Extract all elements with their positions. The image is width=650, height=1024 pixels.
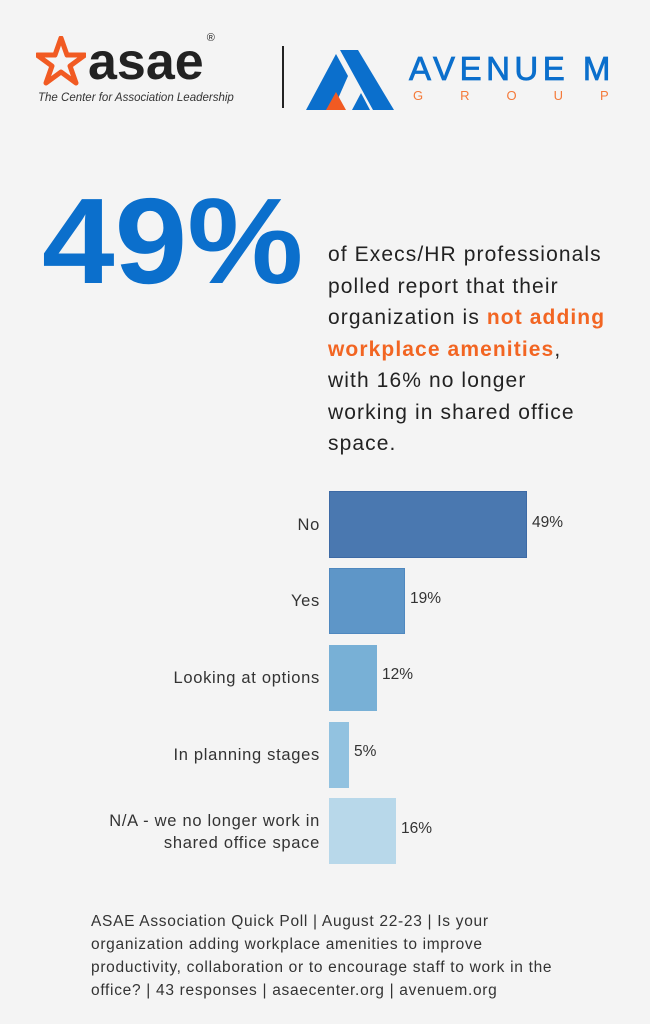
stat description: polled report that their (328, 274, 559, 298)
stat description (328, 243, 605, 455)
stat description: organization is not adding (328, 306, 605, 329)
header logos (36, 32, 646, 110)
footer source note: organization adding workplace amenities to improve (91, 936, 483, 953)
row: N/A: shared office space (164, 834, 320, 852)
footer source note: productivity, collaboration or to encourage staff to work in the (91, 959, 552, 976)
stat description: with 16% no longer (328, 369, 526, 392)
icon: asae star (36, 36, 86, 86)
stat description: working in shared office (328, 400, 575, 424)
asae tagline: The Center for Association Leadership (38, 92, 234, 104)
bar chart (109, 491, 563, 864)
stat description: space. (328, 432, 396, 455)
group text: GROUP (413, 88, 646, 103)
stat description: workplace amenities, (328, 338, 561, 360)
bar chart: 49% (532, 514, 563, 531)
row: In planning stages: In planning stages (173, 746, 320, 764)
row: N/A: N/A - we no longer work in (109, 812, 320, 830)
big stat 49%: 49% (42, 173, 303, 309)
avenue m wordmark: AVENUE M (409, 50, 615, 87)
row: N/A (109, 812, 320, 852)
bar chart: 19% (410, 590, 441, 607)
bar chart: 12% (382, 666, 413, 683)
bar chart: 5% (354, 743, 376, 760)
stat description: of Execs/HR professionals (328, 243, 602, 266)
icon: avenue m mountains (306, 50, 394, 110)
footer source note: office? | 43 responses | asaecenter.org | avenuem.org (91, 982, 497, 999)
bar chart: 16% (401, 820, 432, 837)
footer source note: ASAE Association Quick Poll | August 22-23 | Is your (91, 913, 489, 930)
row: Yes: Yes (291, 592, 320, 610)
asae wordmark: asae ® (88, 32, 215, 91)
footer source note (91, 913, 552, 999)
row: No: No (298, 516, 320, 534)
divider (282, 46, 284, 108)
row: Looking at options: Looking at options (173, 669, 320, 687)
